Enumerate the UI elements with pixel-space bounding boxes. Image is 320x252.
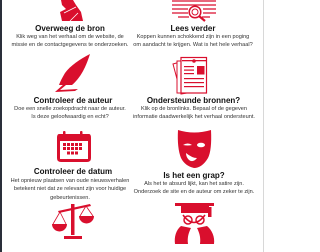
heading: Overweeg de bron: Overweeg de bron (35, 24, 105, 33)
text: Overweeg de bron: Klik weg van het verhaal om de website, de (16, 34, 124, 40)
text: Overweeg de bron (12, 34, 128, 48)
heading: Lees verder: Lees verder (171, 24, 215, 33)
text: Ondersteunde bronnen?: Klik op de bronlinks. Bepaal of de gegeven (141, 106, 247, 112)
right edge line (263, 0, 264, 252)
heading: Ondersteunde bronnen?: Ondersteunde bronnen? (147, 96, 240, 104)
left edge strip (0, 0, 2, 252)
text: Ondersteunde bronnen? (133, 106, 255, 120)
text: Lees verder: Koppen kunnen schokkend zijn in een poging (137, 34, 249, 40)
text: Lees verder: om aandacht te krijgen. Wat is het hele verhaal? (133, 42, 253, 48)
text: Controleer de datum: gebeurtenissen. (50, 195, 90, 201)
text: Controleer de datum: betekent niet dat ze relevant zijn voor huidige (14, 186, 126, 192)
text: Controleer de datum (11, 178, 129, 201)
text: Lees verder (133, 34, 253, 48)
text: Ondersteunde bronnen?: informatie daadwerkelijk het verhaal ondersteunt. (133, 114, 255, 120)
heading: Controleer de auteur: Controleer de auteur (34, 96, 112, 104)
text: Controleer de datum: Het opnieuw plaatsen van oude nieuwsverhalen (11, 178, 129, 184)
heading: Controleer de datum: Controleer de datum (34, 167, 112, 176)
text: Is het een grap?: Onderzoek de site en de auteur om zeker te zijn. (134, 189, 254, 195)
heading: Is het een grap?: Is het een grap? (163, 170, 225, 180)
text: Overweeg de bron: missie en de contactgegevens te onderzoeken. (12, 42, 128, 48)
text: Controleer de auteur: Doe een snelle zoekopdracht naar de auteur. (14, 106, 126, 112)
text: Is het een grap? (134, 181, 254, 195)
text: Controleer de auteur (14, 106, 126, 120)
text: Is het een grap?: Als het te absurd lijkt, kan het satire zijn. (144, 181, 244, 187)
text: Controleer de auteur: Is deze geloofwaardig en echt? (31, 114, 109, 120)
